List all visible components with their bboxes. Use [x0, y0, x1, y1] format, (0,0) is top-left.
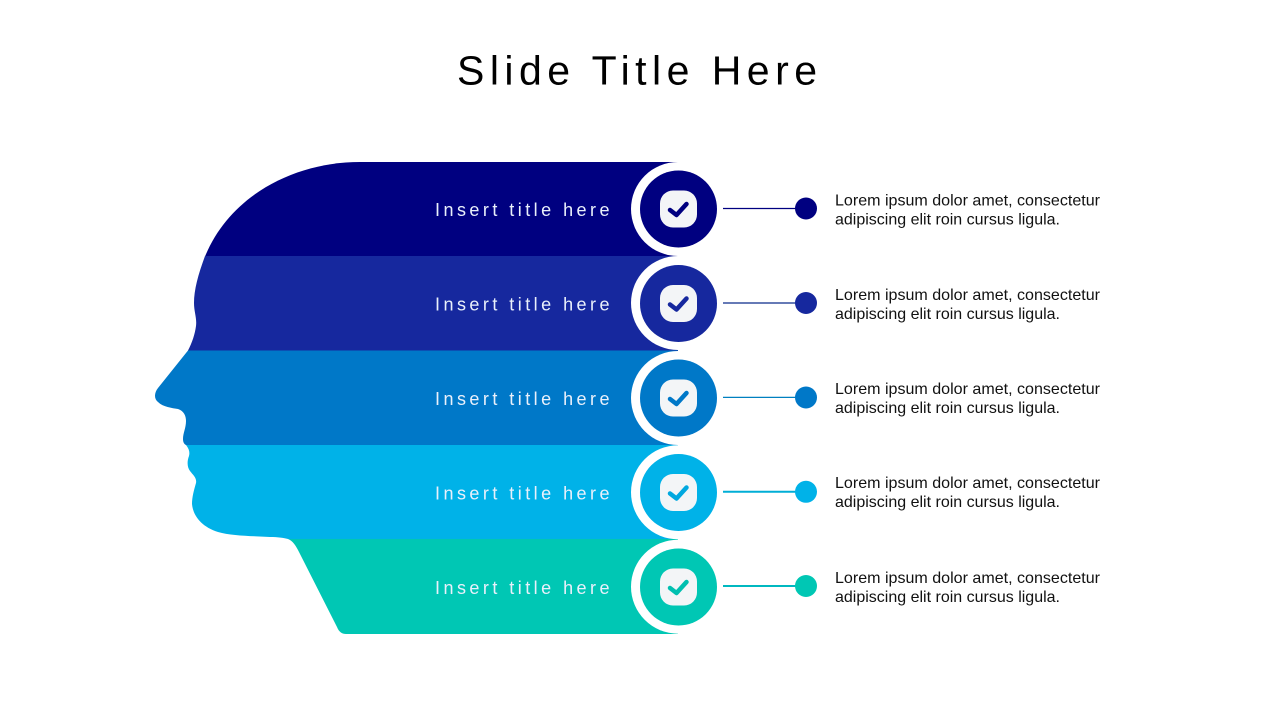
connector 2 [723, 292, 817, 314]
head band 5 [288, 539, 678, 634]
connector 5 [723, 575, 817, 597]
icon 1 [631, 162, 725, 256]
icon 5 [631, 540, 725, 634]
row 1 [435, 162, 1101, 256]
row 3 [435, 351, 1101, 445]
head band 2 [188, 256, 678, 350]
connector 4 [723, 481, 817, 503]
icon 3 [631, 351, 725, 445]
text 5: adipiscing elit roin cursus ligula. [835, 589, 1060, 606]
label 1: Insert title here [435, 200, 610, 220]
text 3: Lorem ipsum dolor amet, consectetur [835, 381, 1101, 398]
title: Slide Title Here [457, 48, 817, 94]
text 4: Lorem ipsum dolor amet, consectetur [835, 475, 1101, 492]
row 4 [435, 445, 1101, 539]
label 2: Insert title here [435, 294, 610, 314]
label 3: Insert title here [435, 389, 610, 409]
head band 4 [186, 445, 678, 539]
head band 1 [205, 162, 678, 256]
head band 3 [155, 350, 678, 445]
text 5: Lorem ipsum dolor amet, consectetur [835, 570, 1101, 587]
icon 4 [631, 445, 725, 539]
text 2: adipiscing elit roin cursus ligula. [835, 306, 1060, 323]
text 1: Lorem ipsum dolor amet, consectetur [835, 192, 1101, 210]
icon 2 [631, 256, 725, 350]
text 1: adipiscing elit roin cursus ligula. [835, 212, 1060, 228]
text 4: adipiscing elit roin cursus ligula. [835, 494, 1060, 511]
label 5: Insert title here [435, 578, 610, 598]
text 3: adipiscing elit roin cursus ligula. [835, 400, 1060, 417]
connector 3 [723, 386, 817, 408]
label 4: Insert title here [435, 484, 610, 504]
connector 1 [723, 198, 817, 220]
panel: head silhouette [155, 162, 678, 634]
row 2 [435, 256, 1101, 350]
text 2: Lorem ipsum dolor amet, consectetur [835, 287, 1101, 304]
row 5 [435, 540, 1101, 634]
